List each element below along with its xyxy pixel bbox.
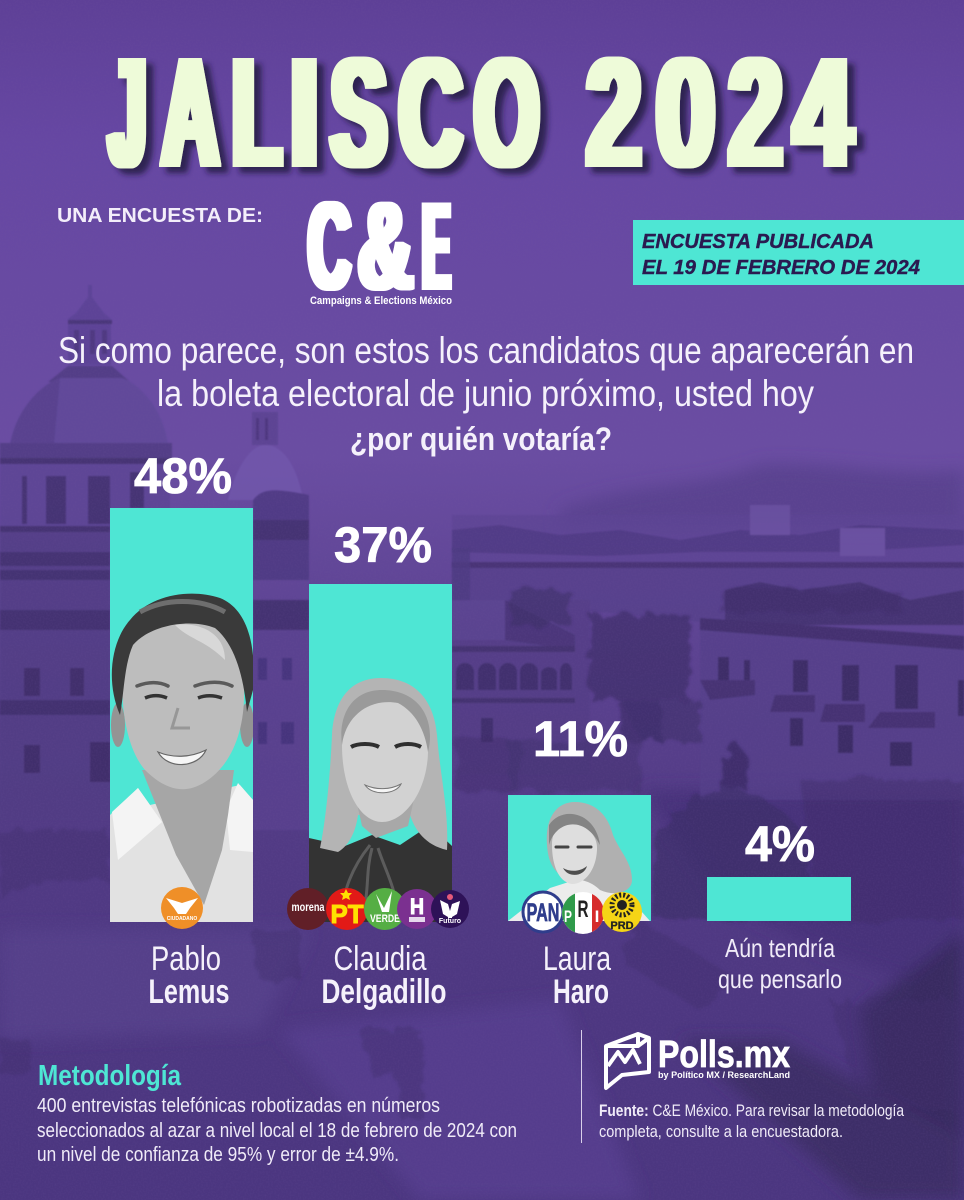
logo: C&E: C — [308, 178, 350, 316]
logos: coalition parties: PRD — [610, 920, 634, 932]
title: S — [331, 26, 387, 198]
trees — [455, 590, 964, 920]
bar: undecided 4% — [707, 816, 851, 994]
divider — [581, 1030, 582, 1143]
name: Laura — [543, 940, 611, 978]
question text — [58, 330, 914, 457]
title: 4 — [794, 26, 852, 198]
hair — [547, 802, 632, 893]
logos: coalition parties: Futuro — [439, 918, 461, 925]
logo: Polls.mx: by Político MX / ResearchLand — [658, 1070, 790, 1080]
title — [110, 26, 852, 198]
label: Aún tendría — [725, 933, 835, 963]
title: A — [162, 26, 218, 198]
logos: coalition parties: PT — [330, 899, 364, 929]
title: 2 — [728, 26, 782, 198]
neck — [358, 802, 413, 838]
ears — [111, 703, 125, 747]
blouse — [309, 825, 452, 922]
methodology block — [37, 1060, 517, 1166]
bar: Laura Haro 11% — [508, 711, 651, 1011]
face — [122, 618, 244, 789]
bar and portrait — [110, 508, 254, 929]
value: 37%: 37% — [334, 517, 432, 573]
neck and chest — [142, 770, 234, 905]
title: J — [110, 26, 146, 198]
value: 4%: 4% — [745, 816, 815, 872]
badge: publication date: EL 19 DE FEBRERO DE 2024 — [642, 257, 920, 279]
face — [552, 823, 597, 884]
features — [556, 846, 591, 848]
shirt — [110, 785, 253, 922]
source note — [599, 1101, 904, 1141]
bar and portrait — [309, 584, 452, 922]
shoulders — [508, 880, 650, 921]
heading: Metodología — [38, 1060, 182, 1092]
label: que pensarlo — [718, 964, 842, 994]
question text: la boleta electoral de junio próximo, usted hoy — [157, 373, 814, 414]
dome left — [0, 285, 470, 830]
value: 48%: 48% — [134, 448, 232, 504]
icon: chart box — [606, 1034, 649, 1088]
title: 2 — [586, 26, 641, 198]
features — [351, 744, 421, 747]
bar and portrait — [508, 795, 651, 921]
subtitle: una encuesta de: UNA ENCUESTA DE: — [57, 205, 263, 227]
title: O — [474, 26, 539, 198]
body text — [37, 1095, 517, 1166]
badge: publication date: ENCUESTA PUBLICADA — [642, 231, 874, 253]
logo: C&E: Campaigns & Elections México — [310, 295, 452, 307]
source note: completa, consulte a la encuestadora. — [599, 1122, 843, 1141]
title: L — [232, 26, 281, 198]
logos: coalition parties: R — [578, 896, 588, 923]
name: Claudia — [334, 940, 427, 978]
body text: un nivel de confianza de 95% y error de ±4.9%. — [37, 1144, 399, 1166]
source note: Fuente: C&E México. Para revisar la metodología — [599, 1101, 904, 1120]
body text: seleccionados al azar a nivel local el 18 de febrero de 2024 con — [37, 1120, 517, 1142]
logos: coalition parties: PAN — [526, 899, 560, 927]
value: 11%: 11% — [533, 711, 628, 767]
badge: publication date — [633, 220, 964, 285]
park — [0, 830, 964, 1120]
title: 0 — [656, 26, 715, 198]
logos: coalition parties: P — [564, 907, 572, 926]
hair — [320, 678, 447, 852]
bar: Laura Haro 11%: Haro — [553, 973, 609, 1011]
logos: coalition parties: H — [410, 894, 424, 919]
title: C — [399, 26, 462, 198]
face — [342, 698, 428, 822]
title: I — [290, 26, 319, 198]
logo: Polls.mx — [606, 1034, 790, 1088]
bar: Claudia Delgadillo 37% — [287, 517, 469, 1011]
logos: coalition parties — [287, 888, 469, 930]
logo: Polls.mx: Polls.mx — [658, 1034, 790, 1076]
text: E — [423, 178, 450, 316]
features — [137, 682, 232, 686]
body text: 400 entrevistas telefónicas robotizadas en números — [37, 1095, 440, 1117]
logo: Movimiento Ciudadano: CIUDADANO — [167, 916, 197, 922]
logo: C&E: & — [358, 178, 413, 316]
logos: coalition parties: VERDE — [370, 913, 400, 925]
logos: coalition parties: morena — [292, 900, 325, 914]
logo: Movimiento Ciudadano — [161, 887, 203, 929]
hair — [112, 594, 254, 715]
bar: Pablo Lemus 48%: Lemus — [148, 973, 230, 1011]
bar — [707, 877, 851, 921]
logo: C&E — [308, 178, 452, 316]
name: Pablo — [151, 940, 221, 978]
logos: coalition parties — [523, 892, 642, 934]
bar: Claudia Delgadillo 37%: Delgadillo — [322, 973, 446, 1011]
bar: Pablo Lemus 48% — [110, 448, 254, 1011]
label — [718, 933, 842, 994]
logos: coalition parties: I — [595, 907, 599, 926]
question text: ¿por quién votaría? — [350, 421, 612, 457]
